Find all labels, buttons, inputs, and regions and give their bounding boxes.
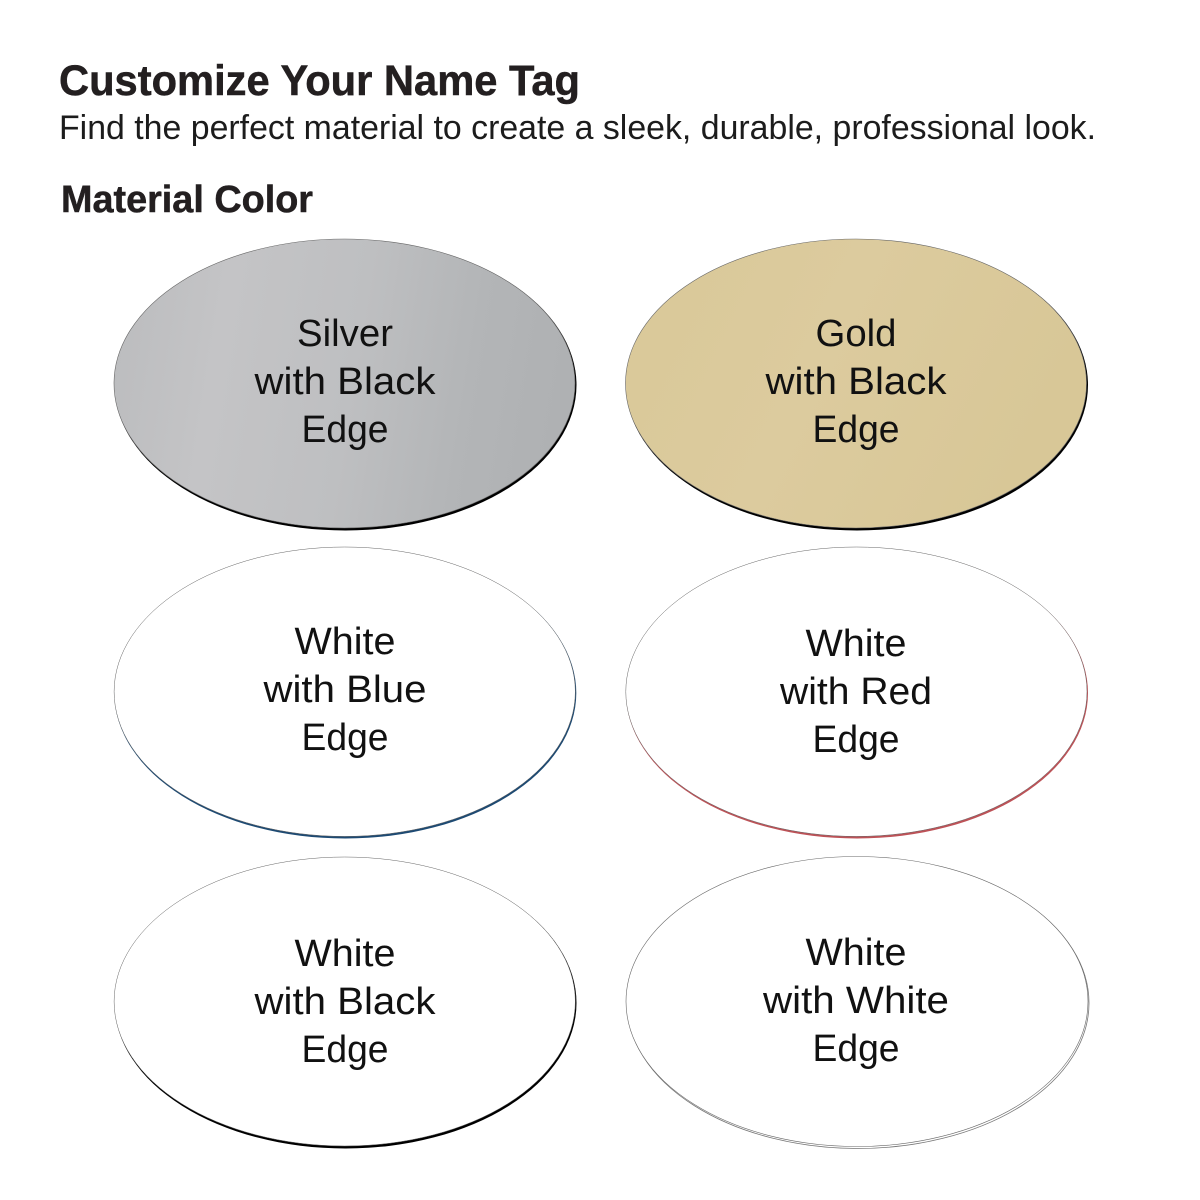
swatch: white with red edge [626,547,1088,838]
swatch: silver with black edge: Silver [297,313,393,355]
swatch: white with white edge [626,856,1089,1148]
swatch: white with red edge: White [806,623,906,665]
swatch: white with blue edge: Edge [302,717,388,759]
swatch: gold with black edge: Edge [812,409,900,451]
swatch: white with white edge: Edge [812,1028,900,1070]
title: Customize Your Name Tag [59,57,580,105]
swatch: white with black edge [114,857,576,1148]
subtitle: Find the perfect material to create a sleek, durable, professional look. [59,109,1096,147]
swatch: white with white edge: with White [762,980,949,1022]
swatch: gold with black edge [626,239,1088,530]
swatch: white with black edge: White [294,933,396,975]
swatch: silver with black edge [114,239,576,530]
swatch: white with blue edge [114,547,576,838]
swatch: silver with black edge: with Black [253,361,437,403]
swatch: white with red edge: Edge [812,719,900,761]
swatch: white with blue edge: White [294,621,396,663]
swatch: gold with black edge: with Black [764,361,948,403]
swatch: silver with black edge: Edge [302,409,388,451]
section heading: material color: Material Color [61,179,313,221]
swatch: white with blue edge: with Blue [262,669,426,711]
swatch: white with white edge: White [806,932,906,974]
swatch: white with red edge: with Red [779,671,932,713]
swatch: white with black edge: Edge [302,1029,388,1071]
swatch: gold with black edge: Gold [816,313,896,355]
swatch: white with black edge: with Black [253,981,437,1023]
